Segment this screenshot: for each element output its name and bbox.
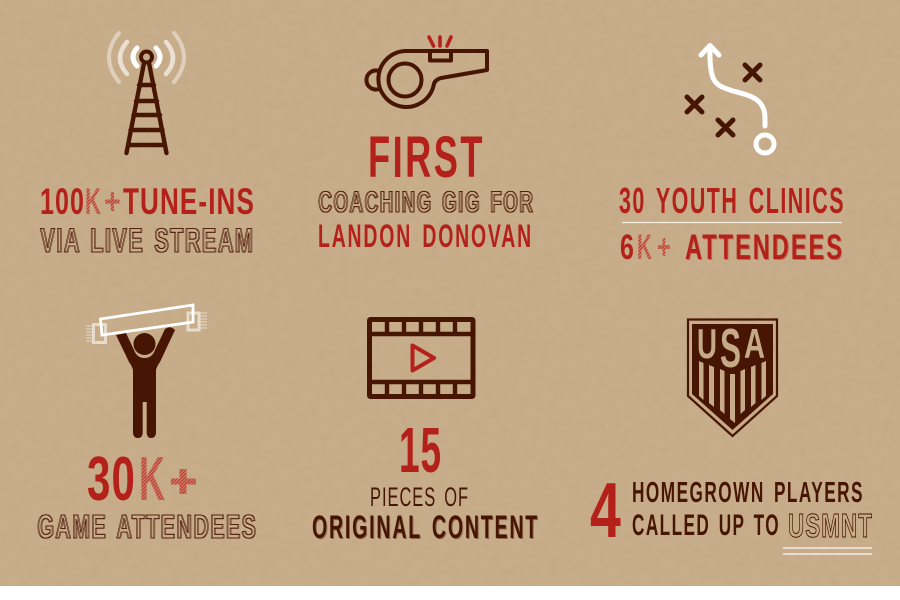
big number 4: 4 xyxy=(590,466,622,554)
icon: radio tower xyxy=(109,33,184,153)
double underline xyxy=(783,548,872,554)
icon: USA crest xyxy=(688,317,777,436)
icon: plus sign xyxy=(171,469,196,494)
panel: live stream tune-ins xyxy=(40,33,255,260)
subhead: pieces of: PIECES OF xyxy=(370,482,469,512)
headline: 100K+ tune-ins: 100 xyxy=(40,181,85,222)
icon: fan holding scarf xyxy=(86,305,207,438)
text: called up to: CALLED UP TO xyxy=(632,509,780,542)
subhead: coaching gig for: COACHING GIG FOR xyxy=(318,186,534,219)
panel: game attendees xyxy=(37,305,257,545)
panel: original content xyxy=(312,319,539,545)
panel: first coaching gig xyxy=(318,37,534,254)
subhead: via live stream: VIA LIVE STREAM xyxy=(40,222,254,260)
headline: 30K+: K xyxy=(139,445,166,514)
headline: 6K+ attendees: 6 xyxy=(620,228,635,267)
divider line xyxy=(622,222,842,224)
subhead: original content: ORIGINAL CONTENT xyxy=(312,509,539,545)
panel: homegrown players xyxy=(590,317,873,554)
headline: 6K+ attendees: K xyxy=(637,228,653,267)
icon: film strip xyxy=(369,319,473,397)
headline: 100K+ tune-ins: TUNE-INS xyxy=(123,181,255,222)
headline: first: FIRST xyxy=(368,125,485,190)
headline: 15: 15 xyxy=(399,414,442,486)
headline: 100K+ tune-ins: + xyxy=(104,181,122,222)
icon: USA crest: U xyxy=(697,320,717,367)
icon: whistle xyxy=(366,37,487,107)
headline: 100K+ tune-ins: K xyxy=(85,181,102,222)
headline: 6K+ attendees: + xyxy=(657,228,672,267)
subhead: landon donovan: LANDON DONOVAN xyxy=(318,218,533,254)
subhead: game attendees: GAME ATTENDEES xyxy=(37,508,257,545)
icon: USA crest: A xyxy=(744,320,765,367)
icon: play diagram xyxy=(687,46,774,153)
icon: USA crest: S xyxy=(720,317,741,379)
panel: youth clinics xyxy=(619,46,845,267)
headline: 30K+: 30 xyxy=(87,445,136,514)
